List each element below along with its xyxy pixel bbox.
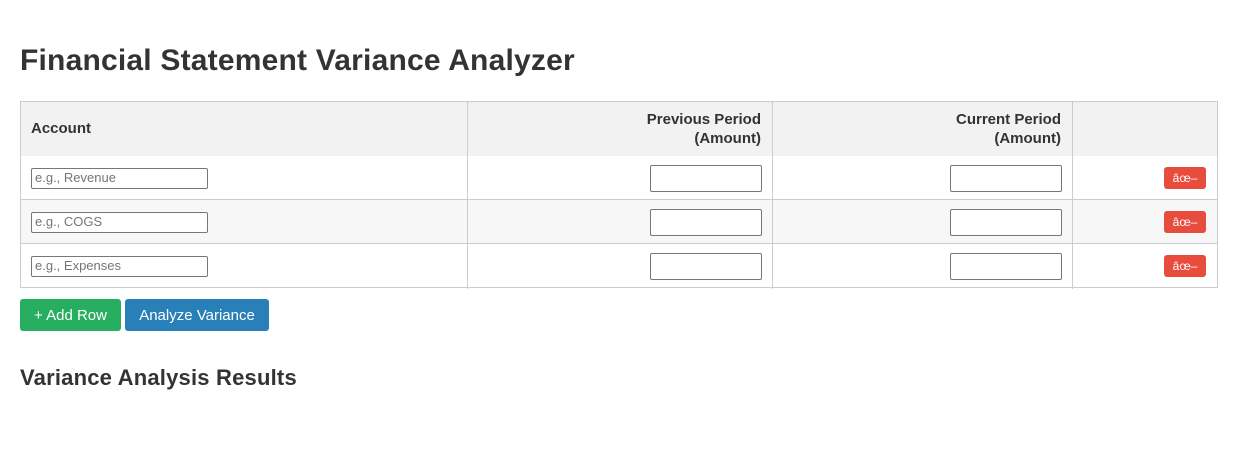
row 1 inputs: e.g., Revenue: [35, 170, 116, 185]
header: previous period: [647, 111, 761, 147]
table header: [20, 101, 1218, 157]
button: add row: [20, 299, 121, 331]
table: accounts: [20, 101, 1218, 289]
row 3 delete button: [1164, 255, 1206, 277]
header: current period: Current Period: [956, 111, 1061, 128]
header: current period: [956, 111, 1061, 147]
row 2 inputs: e.g., COGS: [35, 214, 102, 229]
button: add row: + Add Row: [34, 307, 107, 324]
row 1 delete button: âœ–: [1173, 171, 1197, 185]
row 1 delete button: [1164, 167, 1206, 189]
button: analyze variance: [125, 299, 269, 331]
row 1 inputs: [31, 168, 208, 189]
header: current period: (Amount): [994, 130, 1061, 147]
results heading: Variance Analysis Results: [20, 365, 297, 390]
row 2 inputs: [31, 212, 208, 233]
header: previous period: (Amount): [694, 130, 761, 147]
row 3 inputs: e.g., Expenses: [35, 258, 121, 273]
button: analyze variance: Analyze Variance: [139, 307, 255, 324]
row 2 delete button: [1164, 211, 1206, 233]
row 2 delete button: âœ–: [1173, 215, 1197, 229]
title: Financial Statement Variance Analyzer: [20, 44, 575, 77]
row 3 inputs: [31, 256, 208, 277]
header: previous period: Previous Period: [647, 111, 761, 128]
header: account: Account: [31, 120, 91, 137]
row 3 delete button: âœ–: [1173, 259, 1197, 273]
